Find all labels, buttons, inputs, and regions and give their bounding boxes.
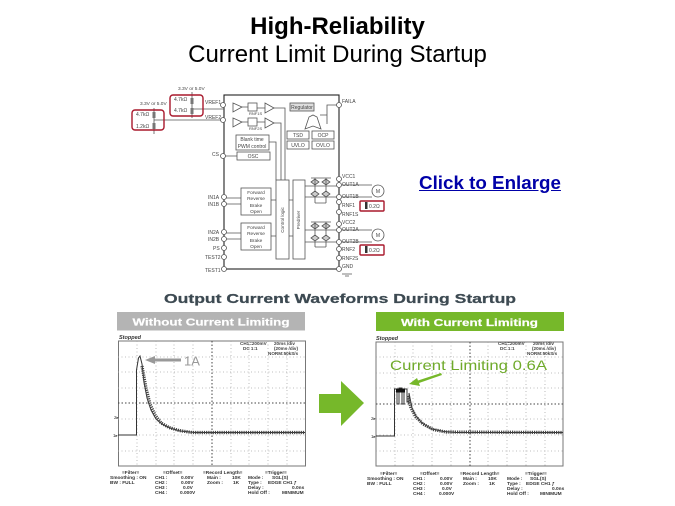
PWM control blocks: PWM control bbox=[238, 144, 266, 150]
logic blocks: Brake bbox=[250, 238, 263, 244]
logic blocks: Forward bbox=[247, 225, 265, 231]
scope readout: without limiting: ≡Filter≡ bbox=[122, 470, 140, 476]
scope readout: with limiting: 0.00V bbox=[440, 476, 453, 482]
arrow: big green bbox=[319, 381, 364, 426]
scope: without limiting: 2▸ bbox=[114, 415, 120, 420]
output bridge and motors bbox=[305, 99, 384, 276]
scope readout: without limiting: ≡Offset≡ bbox=[163, 470, 183, 476]
scope readout: without limiting: ≡Trigger≡ bbox=[265, 470, 287, 476]
PWM control blocks: Blank time bbox=[240, 137, 264, 143]
circuit block diagram bbox=[132, 86, 384, 276]
logic blocks: Open bbox=[250, 209, 262, 215]
protection blocks: OCP bbox=[318, 133, 329, 139]
scope readout: with limiting: Delay : bbox=[507, 486, 523, 492]
logic blocks: Forward bbox=[247, 190, 265, 196]
output bridge and motors: M bbox=[376, 233, 380, 239]
scope: with limiting: DC 1:1 bbox=[500, 346, 515, 351]
scope readout: with limiting: ≡Trigger≡ bbox=[525, 471, 547, 477]
scope: with limiting: (20ms /div) bbox=[532, 346, 556, 351]
scope readout: with limiting: BW : FULL bbox=[367, 481, 392, 487]
protection blocks: Regulator bbox=[291, 105, 313, 111]
reference divider 2: VREF2 bbox=[205, 115, 221, 121]
logic blocks: Reverse bbox=[247, 231, 265, 237]
input pins: IN1A bbox=[208, 195, 220, 201]
output bridge and motors: OUT1A bbox=[342, 182, 359, 188]
waveforms heading: Output Current Waveforms During Startup bbox=[164, 291, 516, 306]
scope readout: with limiting: Mode : bbox=[507, 476, 523, 482]
scope readout: with limiting: MINIMUM bbox=[540, 491, 562, 497]
logic blocks bbox=[224, 180, 305, 259]
scope readout: without limiting: Mode : bbox=[248, 475, 264, 481]
scope readout: without limiting: 0.000V bbox=[180, 490, 196, 496]
scope readout: without limiting: SGL(S) bbox=[272, 475, 289, 481]
input pins: TEST2 bbox=[205, 255, 221, 261]
scope readout: with limiting: 0.0V bbox=[442, 486, 453, 492]
amplifier chain bbox=[220, 102, 285, 180]
reference divider 1: 4.7kΩ bbox=[174, 108, 187, 114]
scope readout: without limiting: 0.00V bbox=[181, 475, 194, 481]
scope readout: with limiting: 0.000V bbox=[439, 491, 455, 497]
title: High-Reliability bbox=[250, 13, 425, 40]
scope: without limiting: NORM:50kS/s bbox=[268, 351, 299, 356]
scope readout: without limiting: 1K bbox=[233, 480, 240, 486]
logic blocks: Open bbox=[250, 244, 262, 250]
reference divider 1 bbox=[170, 86, 224, 118]
reference divider 2: 4.7kΩ bbox=[136, 112, 149, 118]
input pins: PS bbox=[213, 246, 220, 252]
logic blocks: Reverse bbox=[247, 196, 265, 202]
scope: without limiting: 1▸ bbox=[113, 433, 119, 438]
reference divider 2 bbox=[132, 101, 224, 134]
scope readout: without limiting: ≡Record Length≡ bbox=[203, 470, 243, 476]
scope readout: with limiting: CH2 : bbox=[413, 481, 426, 487]
scope: with limiting: 2▸ bbox=[371, 416, 377, 421]
input pins: CS bbox=[212, 152, 220, 158]
scope readout: without limiting: Smoothing : ON bbox=[110, 475, 147, 481]
reference divider 1: VREF1 bbox=[205, 100, 221, 106]
scope readout: without limiting: BW : FULL bbox=[110, 480, 135, 486]
label: without current limiting: Without Current Limiting bbox=[132, 316, 290, 328]
waveform trace bbox=[376, 388, 563, 436]
amplifier chain: RNF1S bbox=[249, 111, 262, 116]
scope readout: with limiting: EDGE CH1 ƒ bbox=[526, 481, 555, 487]
subtitle: Current Limit During Startup bbox=[188, 41, 487, 68]
label: without current limiting bbox=[117, 312, 305, 330]
output bridge and motors: VCC2 bbox=[342, 220, 356, 226]
label: with current limiting: With Current Limiting bbox=[401, 317, 538, 329]
output bridge and motors: RNF2 bbox=[342, 247, 355, 253]
output bridge and motors: OUT2B bbox=[342, 239, 359, 245]
scope readout: with limiting: SGL(S) bbox=[530, 476, 547, 482]
scope readout: without limiting: 0.0ns bbox=[292, 485, 305, 491]
scope readout: without limiting: 10K bbox=[232, 475, 241, 481]
scope readout: with limiting: 0.0ns bbox=[552, 486, 565, 492]
output bridge and motors: RNF2S bbox=[342, 256, 359, 262]
scope readout: with limiting: CH3 : bbox=[413, 486, 426, 492]
scope readout: with limiting: CH4 : bbox=[413, 491, 426, 497]
scope readout: without limiting: 0.0V bbox=[183, 485, 194, 491]
1A callout bbox=[145, 356, 181, 364]
link: click to enlarge: Click to Enlarge bbox=[419, 172, 561, 193]
amplifier chain: RNF2S bbox=[249, 126, 262, 131]
scope readout: without limiting: CH3 : bbox=[155, 485, 168, 491]
waveform trace bbox=[118, 356, 305, 435]
scope readout: with limiting: 10K bbox=[488, 476, 497, 482]
scope: with limiting: 1▸ bbox=[371, 434, 377, 439]
scope readout: without limiting: EDGE CH1 ƒ bbox=[268, 480, 297, 486]
scope readout: without limiting: Main : bbox=[207, 475, 221, 481]
scope readout: with limiting: ≡Record Length≡ bbox=[460, 471, 500, 477]
scope: without limiting: DC 1:1 bbox=[243, 346, 258, 351]
input pins: IN2A bbox=[208, 230, 220, 236]
output bridge and motors: VCC1 bbox=[342, 174, 356, 180]
protection blocks: UVLO bbox=[291, 143, 305, 149]
output bridge and motors: 0.2Ω bbox=[369, 248, 380, 254]
scope readout: with limiting: 0.00V bbox=[440, 481, 453, 487]
scope readout: without limiting: CH2 : bbox=[155, 480, 168, 486]
scope readout: without limiting: 0.00V bbox=[181, 480, 194, 486]
scope readout: with limiting bbox=[367, 471, 565, 497]
protection blocks: TSD bbox=[293, 133, 303, 139]
scope readout: without limiting: Type : bbox=[248, 480, 262, 486]
scope readout: without limiting: CH4 : bbox=[155, 490, 168, 496]
logic blocks: Predriver bbox=[296, 210, 301, 229]
scope readout: without limiting: MINIMUM bbox=[282, 490, 304, 496]
scope readout: without limiting: Hold Off : bbox=[248, 490, 270, 496]
label: with current limiting bbox=[376, 312, 564, 331]
reference divider 1: 3.3V or 5.0V bbox=[178, 86, 205, 92]
scope readout: with limiting: Smoothing : ON bbox=[367, 476, 404, 482]
output bridge and motors: GND bbox=[342, 264, 354, 270]
current limiting callout: Current Limiting 0.6A bbox=[390, 357, 548, 373]
scope readout: with limiting: Type : bbox=[507, 481, 521, 487]
scope: without limiting: CH1=200mV bbox=[240, 341, 268, 346]
PWM control blocks: OSC bbox=[248, 154, 259, 160]
scope: with limiting bbox=[371, 336, 563, 466]
scope: without limiting: (20ms /div) bbox=[274, 346, 298, 351]
scope readout: with limiting: Hold Off : bbox=[507, 491, 529, 497]
PWM control blocks bbox=[224, 135, 276, 180]
scope: without limiting: 20ms /div bbox=[274, 341, 295, 346]
logic blocks: Control logic bbox=[280, 207, 285, 233]
output bridge and motors: OUT2A bbox=[342, 227, 359, 233]
logic blocks: Brake bbox=[250, 203, 263, 209]
scope readout: with limiting: 1K bbox=[489, 481, 496, 487]
scope readout: with limiting: Main : bbox=[463, 476, 477, 482]
reference divider 2: 3.3V or 5.0V bbox=[140, 101, 167, 107]
scope: without limiting: Stopped bbox=[119, 335, 142, 341]
reference divider 1: 4.7kΩ bbox=[174, 97, 187, 103]
output bridge and motors: OUT1B bbox=[342, 194, 359, 200]
scope: with limiting: CH1=200mV bbox=[498, 341, 526, 346]
IC outline bbox=[224, 95, 339, 269]
scope readout: with limiting: CH1 : bbox=[413, 476, 426, 482]
input pins: IN2B bbox=[208, 237, 220, 243]
output bridge and motors: 0.2Ω bbox=[369, 204, 380, 210]
scope readout: without limiting: Zoom : bbox=[207, 480, 223, 486]
reference divider 2: 1.2kΩ bbox=[136, 124, 149, 130]
scope: with limiting: Stopped bbox=[376, 336, 399, 342]
scope: with limiting: NORM:50kS/s bbox=[527, 351, 558, 356]
scope readout: with limiting: Zoom : bbox=[463, 481, 479, 487]
protection blocks bbox=[287, 103, 339, 149]
scope: with limiting: 20ms /div bbox=[533, 341, 554, 346]
output bridge and motors: RNF1S bbox=[342, 212, 359, 218]
scope: without limiting: 1A bbox=[184, 354, 200, 368]
scope readout: without limiting: Delay : bbox=[248, 485, 264, 491]
output bridge and motors: M bbox=[376, 189, 380, 195]
input pins: TEST1 bbox=[205, 268, 221, 274]
output bridge and motors: RNF1 bbox=[342, 203, 355, 209]
scope readout: without limiting bbox=[110, 470, 305, 496]
protection blocks: OVLO bbox=[316, 143, 330, 149]
input pins: IN1B bbox=[208, 202, 220, 208]
scope readout: with limiting: ≡Filter≡ bbox=[380, 471, 398, 477]
scope readout: without limiting: CH1 : bbox=[155, 475, 168, 481]
input pins bbox=[205, 152, 226, 274]
scope readout: with limiting: ≡Offset≡ bbox=[420, 471, 440, 477]
output bridge and motors: FAILA bbox=[342, 99, 356, 105]
scope: without limiting bbox=[113, 335, 306, 466]
